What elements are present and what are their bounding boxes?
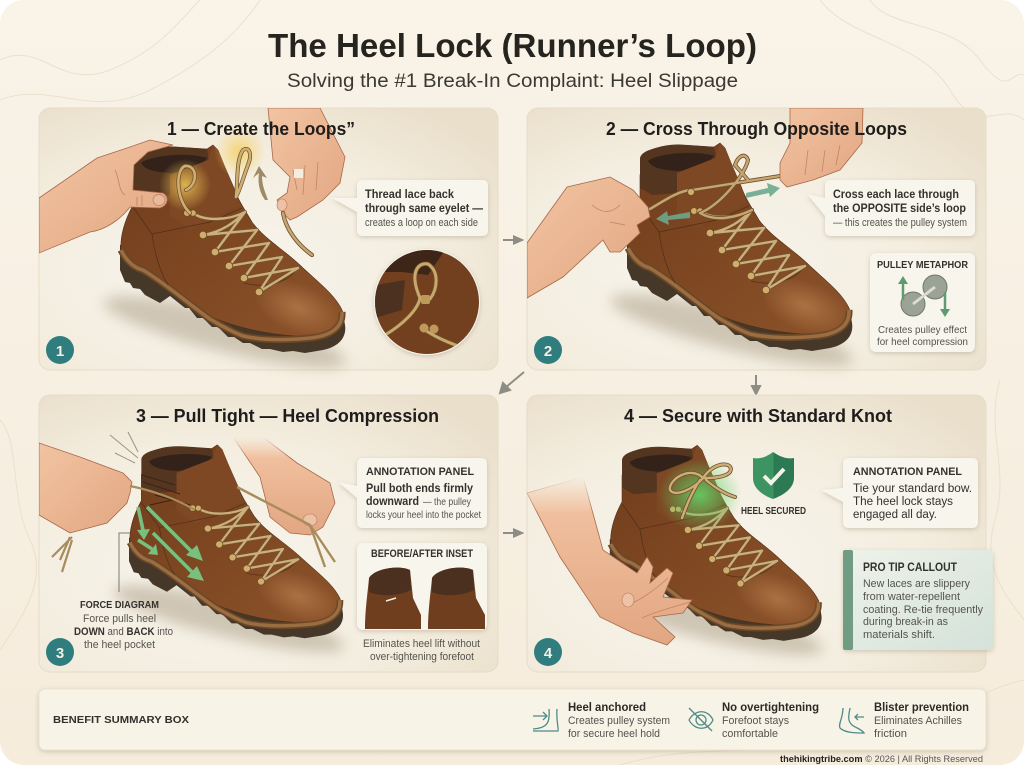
pulley icon: [898, 275, 950, 317]
boot 4: [590, 445, 827, 668]
benefit: blister prevention: [874, 700, 969, 740]
annotation panel: ANNOTATION PANEL: [853, 466, 962, 478]
heading 2: 2 — Cross Through Opposite Loops: [606, 119, 907, 139]
force diagram note: Force pulls heel: [83, 613, 156, 625]
heading 3: 3 — Pull Tight — Heel Compression: [136, 406, 439, 426]
benefit: blister prevention: friction: [874, 728, 907, 740]
green glow and bow knot: [658, 459, 742, 531]
pro tip callout: PRO TIP CALLOUT: [863, 562, 957, 574]
right hand: [233, 437, 335, 535]
heading 4: 4 — Secure with Standard Knot: [624, 406, 892, 426]
before/after inset: BEFORE/AFTER INSET: [371, 548, 473, 560]
icon: shield check: [753, 452, 794, 499]
icon: blister prevention: [840, 708, 864, 733]
benefit: blister prevention: Blister prevention: [874, 700, 969, 714]
before/after caption: [363, 638, 480, 663]
force diagram note: DOWN and BACK into: [74, 626, 173, 638]
annotation panel: engaged all day.: [853, 509, 937, 521]
boot 2: [606, 143, 858, 380]
force diagram note: the heel pocket: [84, 639, 155, 651]
force diagram note: FORCE DIAGRAM: [80, 599, 159, 611]
panel 3: pull tight: [39, 395, 498, 672]
pulley metaphor box: PULLEY METAPHOR: [877, 259, 968, 271]
before boot: [365, 568, 421, 629]
annotation panel: downward: [366, 496, 419, 508]
callout: through same eyelet —: [365, 203, 483, 215]
heading 1: 1 — Create the Loops”: [167, 119, 355, 139]
footer credit: thehikingtribe.com © 2026 | All Rights Reserved: [780, 754, 983, 765]
step badge 4: [534, 638, 562, 666]
left hand: [39, 443, 132, 533]
lace tail: [283, 213, 312, 255]
benefit: no overtightening: comfortable: [722, 728, 778, 740]
annotation panel: The heel lock stays: [853, 496, 953, 508]
annotation panel: ANNOTATION PANEL: [366, 466, 474, 478]
panel 1: create the loops: [39, 108, 498, 382]
annotation panel: — the pulley: [423, 497, 471, 508]
pro tip callout: [843, 550, 993, 650]
benefit summary box: [39, 689, 986, 750]
hand: [527, 477, 692, 645]
callout: [807, 180, 975, 236]
boot 1: [99, 145, 351, 382]
arrow 2 to 4: [752, 375, 760, 394]
benefit: heel anchored: Heel anchored: [568, 700, 646, 714]
arrow 3 to 4: [503, 530, 522, 536]
pulled lace left: [52, 486, 195, 572]
pulley metaphor box: [870, 253, 975, 352]
right hand: [780, 108, 863, 187]
summary label: BENEFIT SUMMARY BOX: [53, 714, 189, 726]
force arrow heads: [137, 529, 204, 581]
step badge 4: 4: [544, 645, 553, 662]
icon: no overtightening: [689, 708, 713, 731]
benefit: heel anchored: Creates pulley system: [568, 715, 670, 727]
right hand: [268, 108, 345, 220]
step badge 1: [46, 336, 74, 364]
pro tip callout: materials shift.: [863, 629, 935, 641]
benefit: no overtightening: [722, 700, 819, 740]
step badge 3: [46, 638, 74, 666]
heel secured label: HEEL SECURED: [741, 506, 806, 517]
annotation panel: Pull both ends firmly: [366, 483, 474, 495]
pro tip callout: from water-repellent: [863, 591, 960, 603]
callout: [332, 180, 488, 236]
pro tip callout: coating. Re-tie frequently: [863, 604, 983, 616]
green force arrows: [138, 507, 192, 572]
subtitle: Solving the #1 Break-In Complaint: Heel Slippage: [287, 71, 738, 92]
icon: heel anchored: [533, 709, 558, 731]
tension strokes: [110, 432, 138, 463]
detail inset circle: [374, 249, 480, 355]
before/after caption: Eliminates heel lift without: [363, 638, 480, 650]
pro tip callout: during break-in as: [863, 616, 948, 628]
up arrow: [253, 166, 268, 200]
annotation panel: Tie your standard bow.: [853, 483, 972, 495]
step badge 1: 1: [56, 343, 64, 360]
after boot: [428, 568, 485, 629]
benefit: no overtightening: No overtightening: [722, 700, 819, 714]
benefit: no overtightening: Forefoot stays: [722, 715, 789, 727]
pro tip callout: New laces are slippery: [863, 578, 970, 590]
benefit: heel anchored: [568, 700, 670, 740]
annotation panel: [338, 458, 487, 528]
benefit: blister prevention: Eliminates Achilles: [874, 715, 962, 727]
left hand: [39, 140, 173, 253]
callout: Thread lace back: [365, 189, 455, 201]
pulled lace right: [237, 487, 335, 567]
heel compression wrinkles: [142, 475, 190, 505]
callout: creates a loop on each side: [365, 217, 478, 229]
highlighted lace loops: [159, 126, 266, 213]
pulley metaphor box: Creates pulley effect: [878, 324, 967, 336]
benefit: heel anchored: for secure heel hold: [568, 728, 660, 740]
left hand: [527, 177, 650, 298]
title: The Heel Lock (Runner’s Loop): [268, 27, 757, 64]
panel 2: cross through opposite loops: [527, 108, 986, 380]
before/after caption: over-tightening forefoot: [370, 651, 474, 663]
before/after inset: [357, 543, 487, 630]
arrow 2 to 3: [500, 372, 524, 393]
callout: — this creates the pulley system: [833, 217, 967, 229]
crossing laces: [650, 156, 780, 218]
force diagram leader: [119, 533, 130, 592]
arrow 1 to 2: [503, 236, 522, 244]
step badge 2: 2: [544, 343, 552, 360]
pulley metaphor box: for heel compression: [877, 336, 968, 348]
callout: the OPPOSITE side’s loop: [833, 203, 966, 215]
step badge 3: 3: [56, 645, 64, 662]
force diagram note: [74, 599, 173, 651]
step badge 2: [534, 336, 562, 364]
annotation panel: [821, 458, 978, 528]
boot 3: [109, 445, 349, 665]
annotation panel: locks your heel into the pocket: [366, 510, 481, 521]
panel 4: secure with knot: [527, 395, 993, 672]
callout: Cross each lace through: [833, 189, 959, 201]
green direction arrows: [656, 183, 780, 225]
